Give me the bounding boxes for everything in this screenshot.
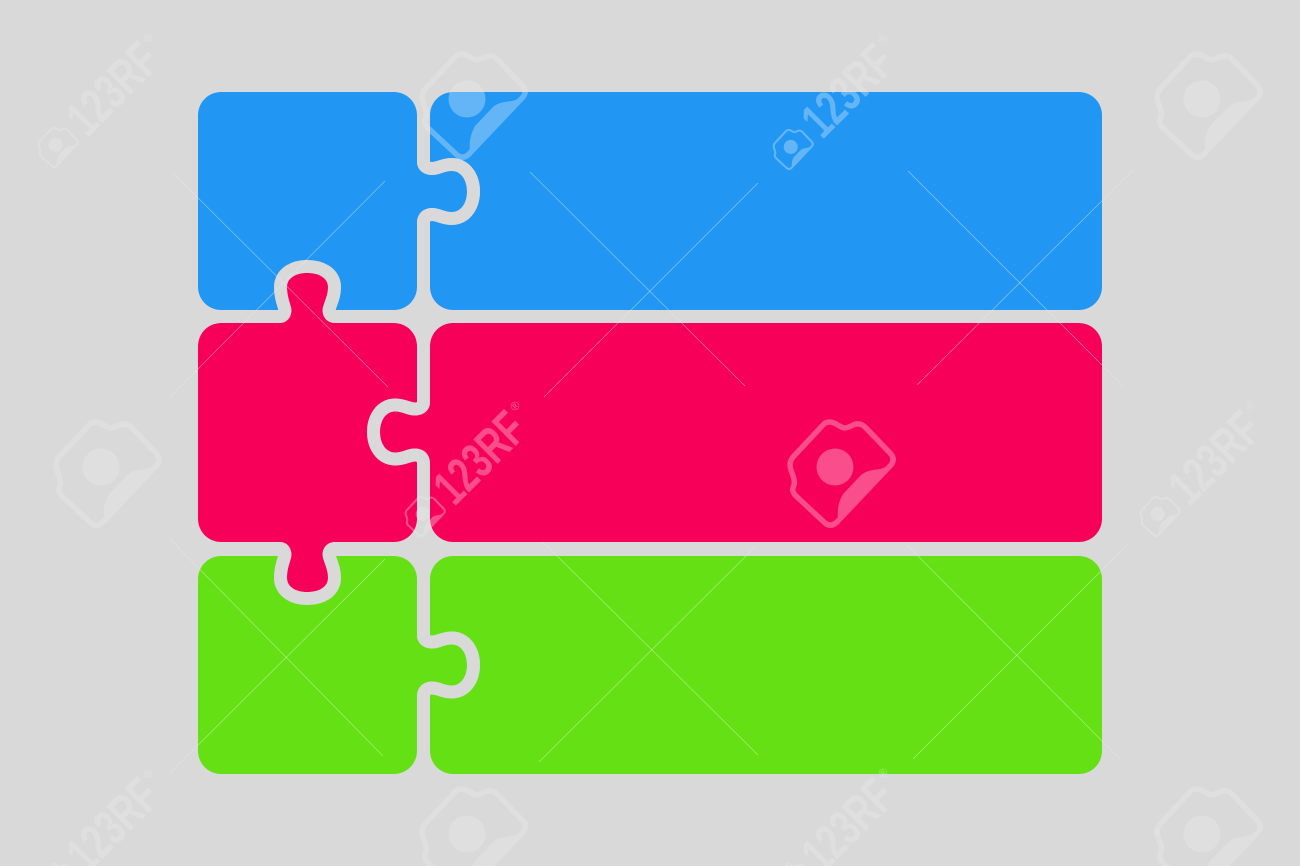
watermark: logo bottom centre: ®	[875, 765, 891, 781]
pink long bar with left tab	[380, 323, 1102, 542]
watermark: logo top left: ®	[140, 29, 156, 45]
puzzle infographic canvas	[170, 92, 1133, 774]
watermark: logo bottom centre	[774, 765, 905, 866]
watermark: logo middle centre	[406, 398, 537, 536]
watermark: large stamp middle centre	[790, 422, 893, 525]
watermark: large stamp top centre	[422, 54, 525, 157]
pink puzzle piece with top and bottom tabs	[198, 273, 417, 592]
watermark: logo top left	[39, 29, 170, 167]
watermark: logo middle centre: ®	[507, 398, 523, 414]
watermark: logo top centre: 123RF	[790, 33, 905, 148]
panel: pink row	[198, 273, 1102, 592]
watermark: logo bottom left	[39, 765, 170, 866]
watermark: large stamp bottom centre	[422, 789, 525, 866]
watermark: logo top left: 123RF	[55, 31, 170, 146]
panel: green row	[198, 556, 1102, 774]
watermark: logo middle right: 123RF	[1157, 400, 1272, 515]
watermark: large stamp top right	[1157, 54, 1260, 157]
watermark: logo middle centre: 123RF	[422, 400, 537, 515]
watermark: logo bottom left: ®	[140, 765, 156, 781]
watermark: logo top centre	[774, 31, 905, 169]
watermark: large stamp middle left	[56, 422, 159, 525]
green puzzle piece with right tab	[198, 556, 467, 774]
watermark: logo middle right	[1141, 398, 1272, 536]
watermark: large stamp bottom right	[1157, 789, 1260, 866]
watermark: logo middle right: ®	[1242, 398, 1258, 414]
blue long bar	[430, 92, 1102, 310]
panel: blue row	[198, 92, 1102, 310]
green long bar	[430, 556, 1102, 774]
blue puzzle piece with right tab	[198, 92, 467, 310]
watermark: logo top centre: ®	[875, 31, 891, 47]
